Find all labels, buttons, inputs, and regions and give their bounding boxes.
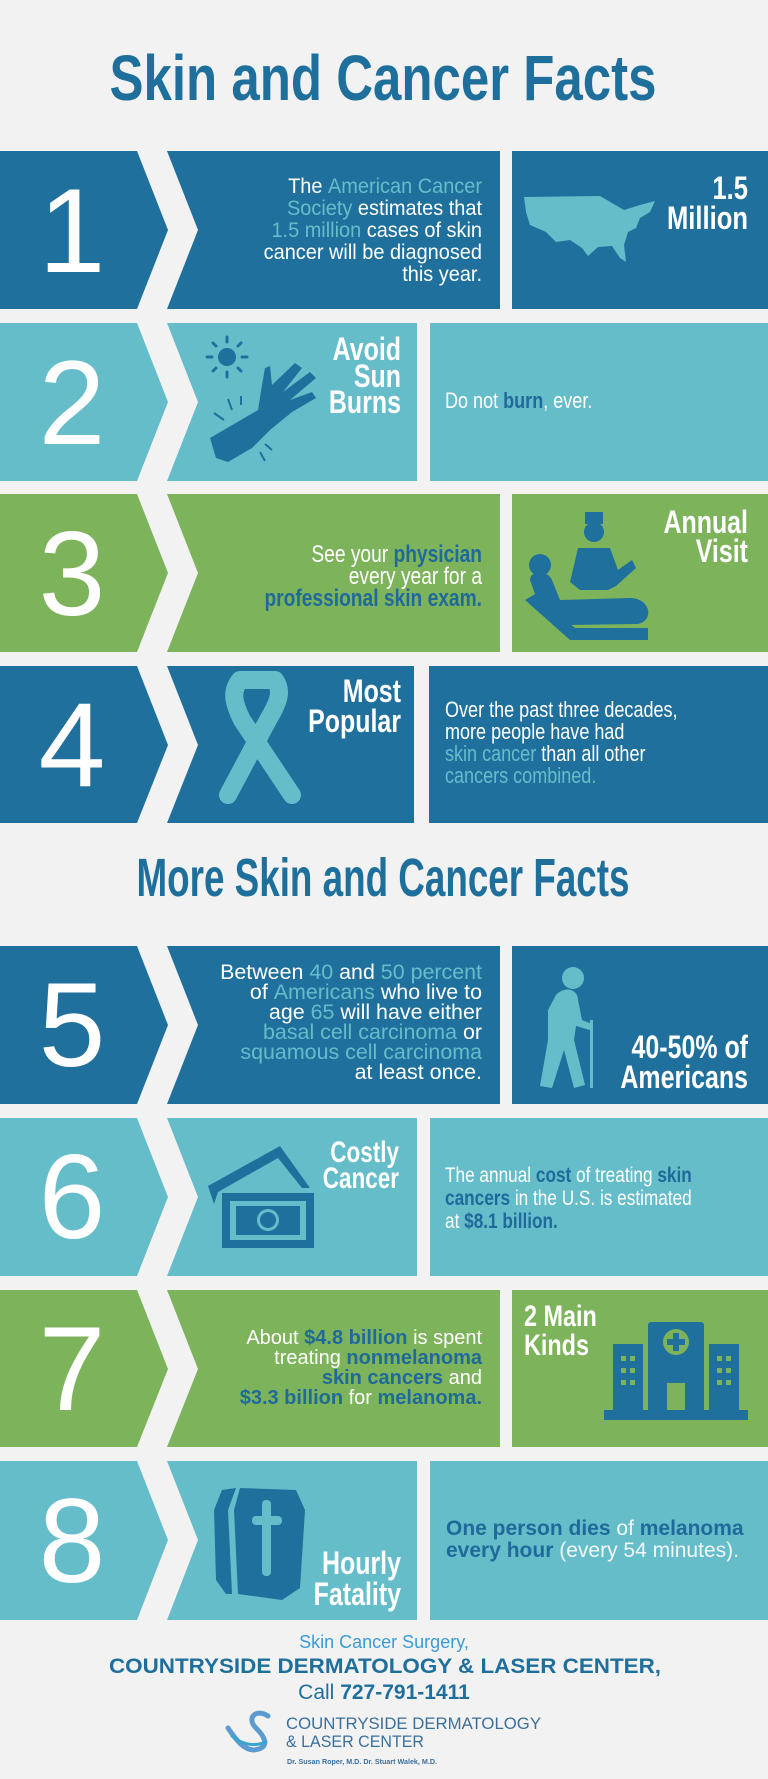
text panel 1: this year. bbox=[402, 263, 482, 286]
text panel 5: of Americans who live to bbox=[250, 981, 482, 1004]
text panel 1: Society estimates that bbox=[287, 197, 482, 220]
text panel 6: at $8.1 billion. bbox=[445, 1211, 558, 1233]
text panel 5 bbox=[167, 946, 500, 1104]
text panel 4 bbox=[429, 666, 768, 823]
text panel 3 bbox=[167, 494, 500, 652]
text panel 4: Over the past three decades, bbox=[445, 698, 678, 722]
number panel 7 bbox=[0, 1290, 168, 1447]
row 8 bbox=[0, 1461, 768, 1620]
icon: doctor and patient bbox=[525, 512, 648, 640]
icon panel 2: Burns bbox=[329, 385, 401, 421]
logo: & LASER CENTER bbox=[286, 1732, 424, 1751]
text panel 7: $3.3 billion for melanoma. bbox=[240, 1387, 482, 1409]
stat panel 5: 40-50% of bbox=[632, 1030, 748, 1066]
icon: ribbon bbox=[228, 680, 292, 795]
text panel 3: See your physician bbox=[311, 540, 482, 568]
icon panel 8: Hourly bbox=[322, 1546, 401, 1582]
stat panel 1: Million bbox=[667, 201, 748, 237]
stat panel 3: Annual bbox=[663, 505, 748, 541]
text panel 5: Between 40 and 50 percent bbox=[220, 961, 482, 984]
stat panel 7: Kinds bbox=[524, 1328, 589, 1362]
icon: money bbox=[208, 1146, 314, 1248]
number panel 6: 6 bbox=[39, 1130, 105, 1264]
text panel 1: cancer will be diagnosed bbox=[264, 241, 482, 264]
row 7 bbox=[0, 1290, 768, 1447]
footer: COUNTRYSIDE DERMATOLOGY & LASER CENTER, bbox=[109, 1655, 661, 1678]
icon: hospital bbox=[604, 1322, 748, 1420]
stat panel 7 bbox=[512, 1290, 768, 1447]
icon panel 8: Fatality bbox=[314, 1577, 401, 1613]
number panel 6 bbox=[0, 1118, 168, 1276]
number panel 1: 1 bbox=[39, 164, 105, 298]
row 4 bbox=[0, 666, 768, 823]
number panel 8: 8 bbox=[39, 1474, 105, 1608]
number panel 5: 5 bbox=[39, 958, 105, 1092]
icon panel 2: Sun bbox=[354, 359, 401, 395]
icon panel 8 bbox=[167, 1461, 417, 1620]
icon: elderly person bbox=[540, 967, 593, 1088]
text panel 2 bbox=[430, 323, 768, 481]
icon panel 6: Cancer bbox=[323, 1161, 399, 1195]
stat panel 5 bbox=[512, 946, 768, 1104]
text panel 2: Do not burn, ever. bbox=[445, 389, 592, 413]
number panel 2: 2 bbox=[39, 336, 105, 470]
logo bbox=[228, 1713, 541, 1766]
row 1 bbox=[0, 151, 768, 309]
text panel 3: every year for a bbox=[349, 562, 483, 590]
footer: Call 727-791-1411 bbox=[298, 1681, 470, 1704]
logo: COUNTRYSIDE DERMATOLOGY bbox=[286, 1714, 541, 1733]
text panel 5: at least once. bbox=[355, 1061, 482, 1084]
text panel 1 bbox=[167, 151, 500, 309]
stat panel 7: 2 Main bbox=[524, 1299, 597, 1333]
icon panel 4: Most bbox=[343, 674, 401, 710]
number panel 4 bbox=[0, 666, 168, 823]
row 3 bbox=[0, 494, 768, 652]
text panel 5: basal cell carcinoma or bbox=[263, 1021, 482, 1044]
stat panel 3 bbox=[512, 494, 768, 652]
stat panel 5: Americans bbox=[620, 1060, 748, 1096]
text panel 8 bbox=[430, 1461, 768, 1620]
text panel 8: One person dies of melanoma bbox=[446, 1517, 744, 1540]
icon panel 2 bbox=[167, 323, 417, 481]
text panel 3: professional skin exam. bbox=[264, 584, 482, 612]
row 5 bbox=[0, 946, 768, 1104]
stat panel 1 bbox=[512, 151, 768, 309]
text panel 4: skin cancer than all other bbox=[445, 742, 646, 766]
number panel 8 bbox=[0, 1461, 168, 1620]
text panel 6 bbox=[430, 1118, 768, 1276]
text panel 7: treating nonmelanoma bbox=[274, 1347, 483, 1369]
icon: coffin bbox=[214, 1488, 305, 1600]
number panel 5 bbox=[0, 946, 168, 1104]
number panel 1 bbox=[0, 151, 168, 309]
text panel 6: The annual cost of treating skin bbox=[445, 1165, 692, 1187]
stat panel 1: 1.5 bbox=[712, 171, 748, 207]
icon panel 6: Costly bbox=[330, 1135, 399, 1169]
icon: USA map bbox=[524, 196, 655, 262]
icon panel 4 bbox=[167, 666, 414, 823]
row 2 bbox=[0, 323, 768, 481]
footer bbox=[109, 1632, 661, 1704]
icon: sun and hand bbox=[207, 337, 316, 462]
number panel 7: 7 bbox=[39, 1302, 105, 1436]
text panel 6: cancers in the U.S. is estimated bbox=[445, 1188, 692, 1210]
footer: Skin Cancer Surgery, bbox=[299, 1632, 469, 1652]
stat panel 3: Visit bbox=[696, 534, 748, 570]
number panel 3 bbox=[0, 494, 168, 652]
logo: Dr. Susan Roper, M.D. Dr. Stuart Walek, M.D. bbox=[287, 1759, 437, 1766]
number panel 3: 3 bbox=[39, 507, 105, 641]
icon panel 2: Avoid bbox=[333, 332, 401, 368]
text panel 5: squamous cell carcinoma bbox=[240, 1041, 482, 1064]
number panel 4: 4 bbox=[39, 678, 105, 812]
number panel 2 bbox=[0, 323, 168, 481]
row 6 bbox=[0, 1118, 768, 1276]
text panel 4: more people have had bbox=[445, 720, 624, 744]
text panel 5: age 65 will have either bbox=[269, 1001, 482, 1024]
text panel 1: 1.5 million cases of skin bbox=[271, 219, 482, 242]
text panel 7: About $4.8 billion is spent bbox=[246, 1327, 482, 1349]
icon: swan bbox=[228, 1713, 268, 1750]
icon panel 6 bbox=[167, 1118, 417, 1276]
text panel 7 bbox=[167, 1290, 500, 1447]
text panel 4: cancers combined. bbox=[445, 764, 596, 788]
text panel 8: every hour (every 54 minutes). bbox=[446, 1539, 739, 1562]
text panel 7: skin cancers and bbox=[322, 1367, 482, 1389]
icon panel 4: Popular bbox=[308, 704, 401, 740]
text panel 1: The American Cancer bbox=[288, 175, 482, 198]
